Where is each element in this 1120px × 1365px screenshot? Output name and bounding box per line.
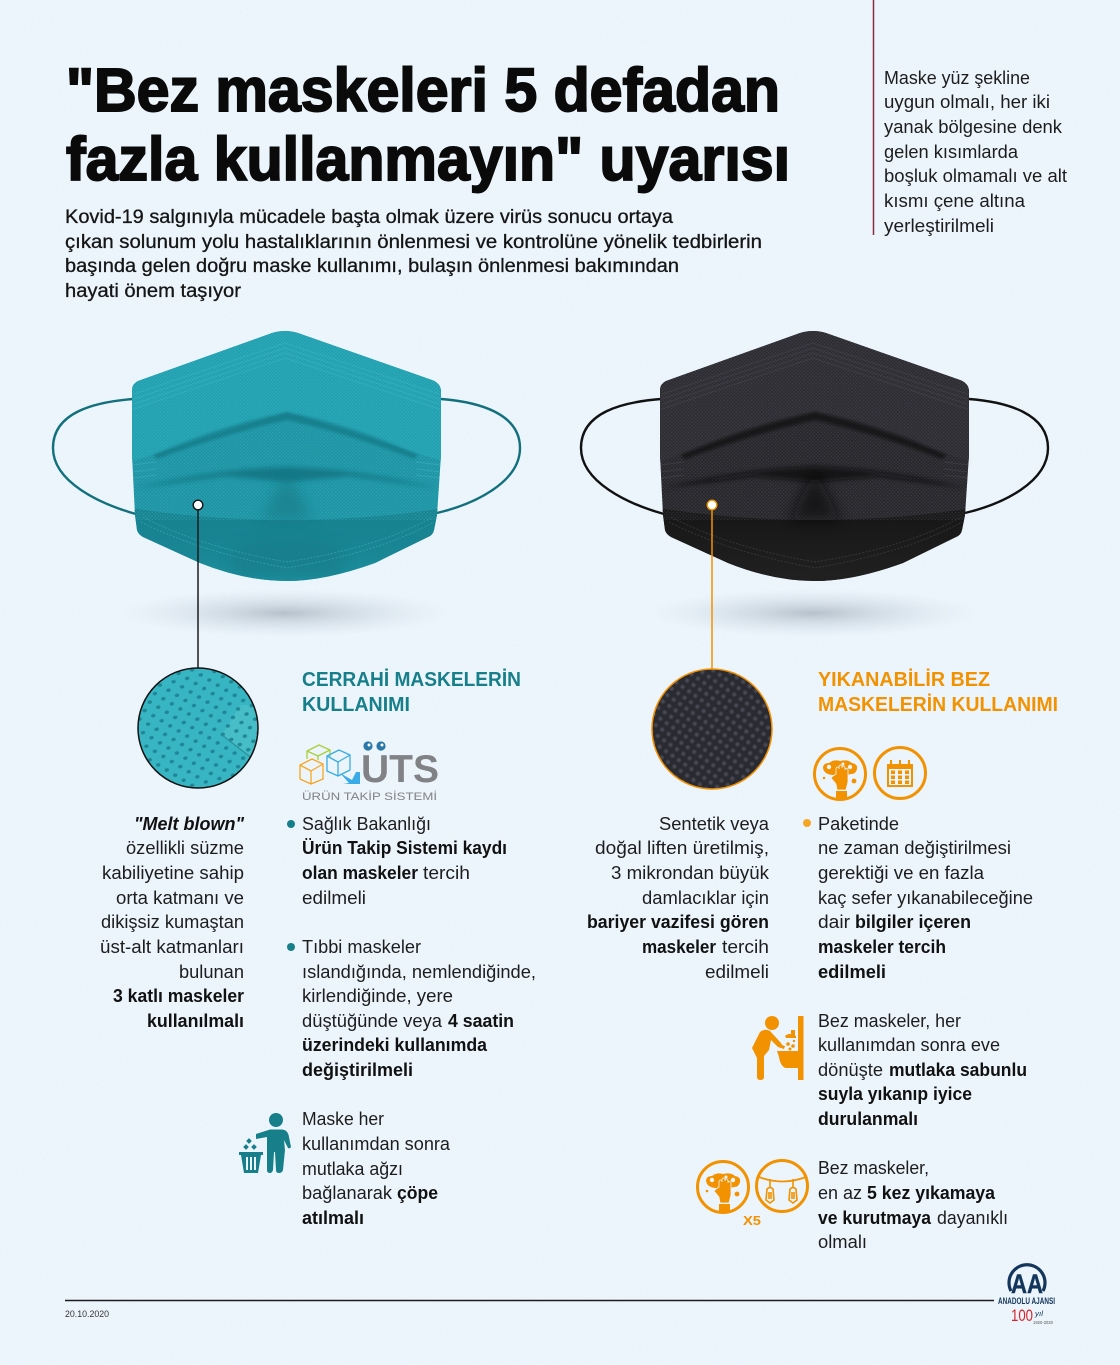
text: cloth fabric description: Sentetik veya [659,814,770,834]
text: cloth fabric description: damlacıklar için [642,888,769,908]
text: five washes: olmalı [818,1232,867,1252]
heading: surgical masks: CERRAHİ MASKELERİN [302,668,521,691]
heading: washable masks: MASKELERİN KULLANIMI [818,693,1058,716]
intro text: hayati önem taşıyor [65,281,242,302]
text: wash with soap: suyla yıkanıp iyice [818,1084,972,1104]
text: wash with soap: mutlaka sabunlu [889,1060,1027,1080]
logo: UTS [300,741,439,803]
text: wash with soap: dönüşte [818,1060,883,1080]
text: medical mask replacement bullet: değiştirilmeli [302,1060,413,1080]
text: five washes: ve kurutmaya [818,1208,932,1228]
text: melt blown description: kabiliyetine sahip [102,863,244,883]
shadow: black mask [648,589,978,637]
icons: five washes and drying [698,1160,808,1228]
heading: surgical masks [302,668,521,716]
text: cloth fabric description: 3 mikrondan büyük [611,863,770,883]
text: discard mask: mutlaka ağzı [302,1159,403,1179]
top-right note: yanak bölgesine denk [884,117,1063,137]
shadow: teal mask [120,589,450,637]
text: medical mask replacement bullet: ıslandığında, nemlendiğinde, [302,962,536,982]
text: cloth fabric description: maskeler [642,937,716,957]
text: melt blown description: dikişsiz kumaştan [101,912,244,932]
text: wash with soap: Bez maskeler, her [818,1011,961,1031]
logo: Anadolu Ajansi: ANADOLU AJANSI [998,1296,1055,1306]
text: melt blown description: "Melt blown" [134,814,244,834]
cloth mask (black) [581,325,1048,590]
icons: five washes and drying: X5 [743,1213,761,1228]
text: package information bullet: kaç sefer yıkanabileceğine [818,888,1033,908]
heading: washable masks: YIKANABİLİR BEZ [818,668,990,691]
text: five washes: dayanıklı [937,1208,1008,1228]
text: product tracking system bullet: Ürün Takip Sistemi kaydı [302,838,507,858]
intro text: başında gelen doğru maske kullanımı, bulaşın önlenmesi bakımından [65,256,679,277]
text: wash with soap: durulanmalı [818,1109,918,1129]
text: cloth fabric description [587,814,770,982]
text: product tracking system bullet: Sağlık Bakanlığı [302,814,431,834]
text: melt blown description: orta katmanı ve [116,888,244,908]
text: package information bullet [803,814,1033,982]
title: "Bez maskeleri 5 defadan [66,56,780,124]
text: melt blown description: üst-alt katmanları [100,937,244,957]
text: medical mask replacement bullet [287,937,536,1080]
text: medical mask replacement bullet: düştüğünde veya [302,1011,443,1031]
text: cloth fabric description: bariyer vazifesi gören [587,912,769,932]
icon: person washing at sink [752,1016,804,1080]
text: package information bullet: dair [818,912,850,932]
text: five washes: en az [818,1183,862,1203]
text: package information bullet: Paketinde [818,814,899,834]
logo: UTS: UTS [361,748,439,791]
text: wash with soap [818,1011,1027,1129]
text: medical mask replacement bullet: 4 saatin [448,1011,514,1031]
top-right note: boşluk olmamalı ve alt [884,166,1067,186]
top-right note: gelen kısımlarda [884,142,1019,162]
logo: UTS: ÜRÜN TAKİP SİSTEMİ [302,790,437,803]
text: five washes: 5 kez yıkamaya [867,1183,996,1203]
text: five washes [818,1158,1008,1252]
text: melt blown description: kullanılmalı [147,1011,244,1031]
top-right note: yerleştirilmeli [884,216,994,236]
logo: Anadolu Ajansi: yıl [1034,1311,1044,1318]
text: melt blown description: 3 katlı maskeler [113,986,244,1006]
heading: washable masks [818,668,1058,716]
intro text [65,207,762,302]
icon: person and trash bin [239,1113,291,1173]
text: product tracking system bullet: edilmeli [302,888,366,908]
top-right note: Maske yüz şekline [884,68,1030,88]
text: discard mask: çöpe [397,1183,438,1203]
text: product tracking system bullet [287,814,507,908]
top-right note: kısmı çene altına [884,191,1026,211]
text: package information bullet: maskeler tercih [818,937,946,957]
logo: Anadolu Ajansi: 1920-2020 [1033,1320,1053,1325]
intro text: çıkan solunum yolu hastalıklarının önlenmesi ve kontrolüne yönelik tedbirlerin [65,232,762,253]
text: melt blown description [100,814,244,1031]
text: five washes: Bez maskeler, [818,1158,929,1178]
text: discard mask [302,1109,451,1228]
logo: Anadolu Ajansi: 100 [1011,1306,1033,1325]
text: package information bullet: ne zaman değiştirilmesi [818,838,1011,858]
icons: washing hand and calendar [814,748,926,800]
text: package information bullet: gerektiği ve en fazla [818,863,985,883]
text: discard mask: bağlanarak [302,1183,393,1203]
text: wash with soap: kullanımdan sonra eve [818,1035,1000,1055]
callout: surgical fabric closeup [137,500,259,789]
callout: cloth fabric closeup [651,500,773,790]
text: package information bullet: bilgiler içeren [855,912,971,932]
text: discard mask: kullanımdan sonra [302,1134,451,1154]
text: product tracking system bullet: olan maskeler [302,863,418,883]
text: discard mask: Maske her [302,1109,384,1129]
text: medical mask replacement bullet: kirlendiğinde, yere [302,986,453,1006]
text: cloth fabric description: doğal liften üretilmiş, [595,838,769,858]
text: product tracking system bullet: tercih [423,863,470,883]
text: discard mask: atılmalı [302,1208,364,1228]
surgical mask (teal) [53,325,520,590]
footer rule and date: 20.10.2020 [65,1309,109,1320]
logo: Anadolu Ajansi [998,1265,1055,1325]
top-right note: uygun olmalı, her iki [884,92,1050,112]
text: medical mask replacement bullet: üzerindeki kullanımda [302,1035,488,1055]
text: cloth fabric description: tercih [722,937,769,957]
text: package information bullet: edilmeli [818,962,886,982]
intro text: Kovid-19 salgınıyla mücadele başta olmak üzere virüs sonucu ortaya [65,207,673,228]
title: fazla kullanmayın" uyarısı [66,125,790,193]
title [66,56,790,193]
text: medical mask replacement bullet: Tıbbi maskeler [302,937,421,957]
top-right note [874,0,1067,236]
text: melt blown description: özellikli süzme [126,838,244,858]
heading: surgical masks: KULLANIMI [302,694,410,716]
text: melt blown description: bulunan [179,962,244,982]
logo: Anadolu Ajansi: AA [1011,1269,1043,1299]
text: cloth fabric description: edilmeli [705,962,769,982]
